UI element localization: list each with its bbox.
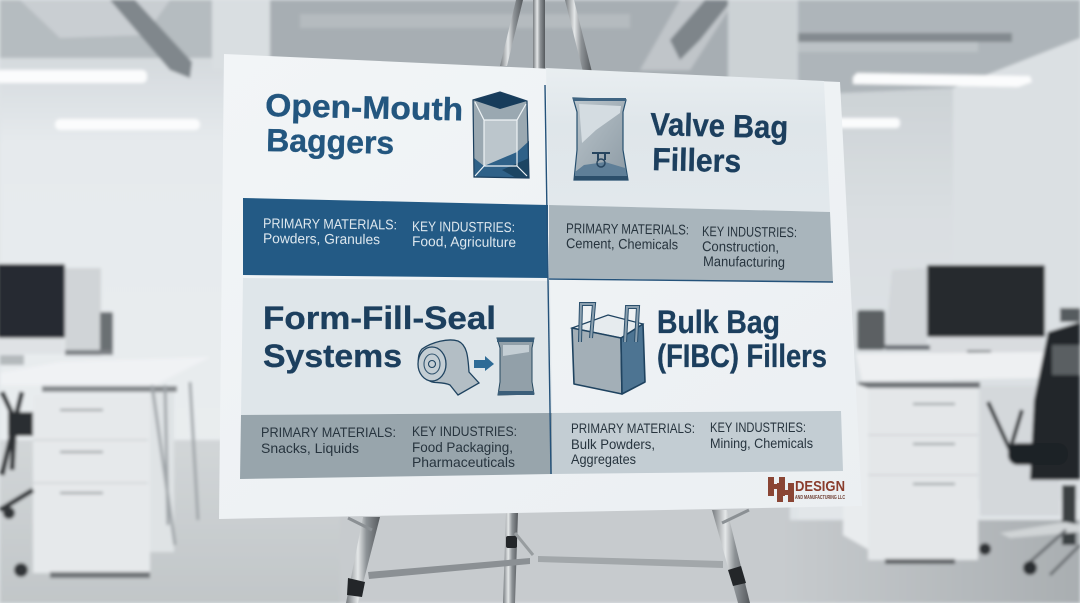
heading: valve bag fillers: Valve Bag (650, 106, 789, 145)
info band: open-mouth baggers: KEY INDUSTRIES: (412, 218, 515, 235)
heading: form-fill-seal systems (263, 300, 496, 374)
heading: open-mouth baggers (265, 87, 464, 161)
office chair (988, 308, 1080, 575)
right desk (843, 265, 1060, 564)
panel dividers (545, 85, 833, 474)
info band: form-fill-seal systems: Snacks, Liquids (261, 440, 359, 456)
info band: bulk bag fillers: Aggregates (571, 451, 636, 467)
left desk (0, 264, 210, 578)
panel: form-fill-seal systems (240, 278, 552, 479)
heading: bulk bag (fibc) fillers: (FIBC) Fillers (657, 338, 827, 374)
info band: bulk bag fillers: KEY INDUSTRIES: (710, 419, 806, 435)
info band: form-fill-seal systems: Pharmaceuticals (412, 454, 515, 470)
easel (346, 0, 750, 603)
panel: valve bag fillers (546, 68, 833, 282)
info band: form-fill-seal systems: KEY INDUSTRIES: (412, 423, 517, 439)
info band: form-fill-seal systems: PRIMARY MATERIALS: (261, 424, 396, 440)
panel: open-mouth baggers (243, 87, 548, 278)
info band: bulk bag fillers: Mining, Chemicals (710, 435, 813, 451)
info band: open-mouth baggers: PRIMARY MATERIALS: (263, 215, 397, 232)
heading: form-fill-seal systems: Systems (263, 338, 402, 374)
display board (219, 54, 862, 519)
icon: film roll to sealed pack (418, 338, 534, 395)
info band: valve bag fillers: Manufacturing (703, 253, 785, 270)
logo: hh design and manufacturing: DESIGN (795, 478, 845, 495)
info band: open-mouth baggers: Food, Agriculture (412, 233, 516, 250)
heading: bulk bag (fibc) fillers: Bulk Bag (657, 304, 780, 340)
info band: bulk bag fillers (552, 411, 843, 474)
info band: open-mouth baggers: Powders, Granules (263, 230, 380, 247)
info band: bulk bag fillers: PRIMARY MATERIALS: (571, 420, 695, 436)
logo: hh design and manufacturing (768, 477, 845, 502)
heading: open-mouth baggers: Open-Mouth (265, 87, 464, 127)
icon: bulk bag (572, 304, 645, 394)
info band: valve bag fillers: Construction, (702, 238, 779, 255)
info band: form-fill-seal systems: Food Packaging, (412, 439, 513, 455)
heading: valve bag fillers (650, 106, 789, 179)
info band: form-fill-seal systems (240, 413, 552, 479)
icon: open-mouth bag (473, 92, 529, 178)
heading: form-fill-seal systems: Form-Fill-Seal (263, 300, 496, 336)
heading: open-mouth baggers: Baggers (266, 122, 395, 161)
info band: valve bag fillers (549, 205, 833, 282)
info band: valve bag fillers: PRIMARY MATERIALS: (566, 220, 689, 238)
heading: bulk bag (fibc) fillers (657, 304, 827, 374)
logo: hh design and manufacturing: AND MANUFACTURING LLC (795, 495, 845, 501)
ceiling lights (0, 70, 1032, 130)
heading: valve bag fillers: Fillers (652, 141, 742, 179)
info band: valve bag fillers: Cement, Chemicals (566, 235, 678, 252)
info band: valve bag fillers: KEY INDUSTRIES: (702, 223, 797, 240)
icon: valve bag (573, 98, 628, 180)
panel: bulk bag fillers (552, 304, 843, 474)
info band: open-mouth baggers (243, 198, 548, 278)
info band: bulk bag fillers: Bulk Powders, (571, 436, 655, 452)
